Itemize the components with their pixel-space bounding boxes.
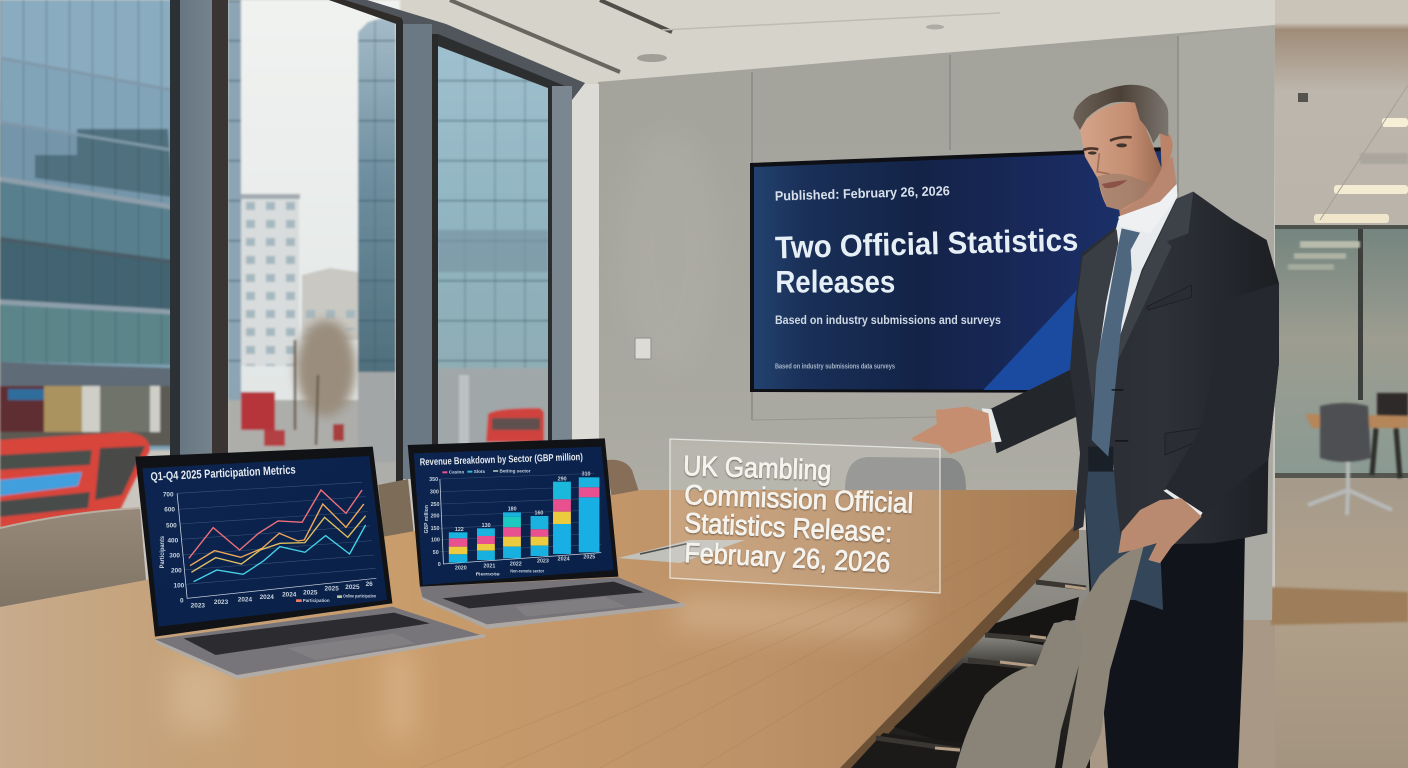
centre window (228, 0, 400, 485)
right window (436, 42, 550, 446)
chart axis labels: 200 (171, 568, 182, 575)
chart axis labels: Participants (160, 535, 166, 568)
chart axis labels: 26 (366, 581, 373, 588)
wall-mounted TV slide (750, 147, 1168, 393)
chart legend: Casino (449, 470, 464, 475)
chart axis labels: 2024 (260, 594, 274, 601)
belt gap (1088, 447, 1113, 472)
lower hand on chair (1118, 498, 1202, 563)
TV heading line 1: Two Official Statistics (775, 222, 1079, 265)
chart axis labels: 400 (167, 538, 179, 545)
ear (1160, 131, 1173, 169)
glass text: Statistics Release: (684, 507, 893, 548)
glass sheet (670, 439, 940, 593)
extended arm shading (990, 370, 1077, 453)
right laptop: stacked bar chart (408, 438, 685, 629)
chart axis labels: 200 (431, 514, 440, 520)
chart axis labels: 500 (166, 522, 177, 529)
right arm shading (1163, 283, 1279, 517)
chart legend: Online participation (343, 594, 376, 599)
chart axis labels (424, 471, 595, 576)
eyes and brows (1083, 137, 1132, 155)
chart axis labels: 310 (582, 471, 591, 477)
necktie (1092, 228, 1140, 457)
boardroom table (0, 490, 1079, 768)
chart axis labels: 50 (433, 550, 439, 556)
laptop base (155, 607, 485, 678)
chart axis labels: Non-remote sector (510, 569, 544, 574)
chart axis labels: 100 (174, 582, 185, 589)
TV date line: Published: February 26, 2026 (775, 183, 950, 204)
presenter trousers (1083, 470, 1245, 768)
chart axis labels: 2021 (483, 564, 495, 570)
laptop screen (142, 456, 387, 627)
glass text: UK Gambling (683, 450, 832, 486)
chart axis labels: 2022 (510, 561, 522, 567)
face (1080, 102, 1162, 210)
chart data lines (189, 490, 366, 582)
dark chair seats under the table (851, 582, 1086, 768)
chart axis labels: 180 (508, 506, 517, 512)
laptop bezel (408, 438, 618, 587)
left lapel (1077, 229, 1118, 403)
rear chair back (1062, 545, 1144, 768)
chart axis labels: 300 (169, 552, 181, 559)
chart title: Revenue Breakdown by Sector (GBP million) (420, 452, 583, 468)
mouth (1102, 180, 1127, 188)
chart axis labels: 130 (482, 523, 491, 529)
stubble (1097, 174, 1150, 210)
pointing hand (912, 407, 992, 454)
shirt collar (1118, 184, 1177, 233)
transparent glass panel with release title (670, 439, 940, 593)
chart axis labels: 290 (558, 476, 567, 482)
left laptop: line chart (135, 447, 485, 679)
chart axis labels: 2024 (282, 592, 297, 599)
city view through the windows (0, 0, 550, 530)
chart legend (296, 594, 376, 603)
area under the table (840, 530, 1090, 768)
chart axis labels: 350 (429, 477, 438, 483)
chart axis labels: 300 (430, 489, 439, 495)
chart axis labels: 0 (180, 598, 184, 605)
shirt (1097, 185, 1177, 372)
chart axis labels: 2025 (325, 586, 339, 593)
laptop screen (414, 447, 614, 585)
TV sub line: Based on industry submissions and surveys (775, 314, 1001, 327)
TV heading line 2: Releases (775, 265, 895, 300)
corridor on the right (1085, 0, 1408, 768)
chart gridlines and axes (177, 482, 376, 598)
chart axis labels: 600 (164, 507, 176, 514)
chart axis labels: 2025 (345, 584, 360, 591)
chart axis labels: 2024 (558, 557, 570, 563)
jacket buttons (1112, 390, 1128, 441)
chart legend: Betting sector (499, 468, 531, 473)
front chair back (956, 620, 1083, 768)
chart gridlines and axes (440, 473, 601, 564)
nose (1097, 153, 1109, 174)
suit jacket (988, 192, 1279, 545)
window frames (170, 0, 585, 485)
TV footnote: Based on industry submissions data surveys (775, 361, 895, 370)
chart axis labels: 2025 (303, 590, 318, 597)
glass text: February 26, 2026 (684, 537, 891, 578)
laptop base (420, 577, 685, 628)
corridor table and chair (1305, 393, 1408, 515)
left window building (0, 0, 172, 450)
room background: ceiling (0, 0, 1408, 100)
chart axis labels: 100 (431, 538, 440, 544)
chart axis labels: 2024 (238, 597, 253, 604)
chart axis labels: 0 (438, 562, 441, 568)
chart legend: Slots (474, 469, 486, 474)
chart axis labels: 150 (431, 526, 440, 532)
chart axis labels: 2020 (455, 565, 467, 571)
stacked bars (449, 477, 599, 563)
chart legend: Participation (303, 598, 330, 603)
laptop bezel (135, 447, 392, 637)
chart axis labels: GBP million (424, 505, 430, 533)
hair (1073, 85, 1168, 143)
chart legend (442, 468, 531, 475)
chart axis labels: 700 (163, 492, 174, 499)
chart axis labels (160, 492, 373, 609)
chart axis labels: 160 (534, 510, 544, 516)
chart axis labels: 250 (431, 502, 440, 508)
shirt cuffs (982, 408, 1203, 517)
presenter upper body (912, 85, 1279, 563)
chart title: Q1-Q4 2025 Participation Metrics (150, 463, 296, 484)
chairs behind the table (0, 457, 966, 608)
glass text: Commission Official (684, 479, 914, 519)
chart axis labels: 2025 (583, 555, 595, 561)
light switch (635, 338, 651, 359)
chart axis labels: 2023 (191, 602, 206, 609)
glass text (683, 450, 914, 578)
concrete wall with panels (572, 25, 1275, 620)
TV accent triangle (983, 290, 1107, 390)
red bus, left (0, 432, 150, 530)
neck (1118, 157, 1177, 227)
breast and hip pockets (1147, 285, 1202, 455)
chart axis labels: 122 (455, 527, 464, 533)
right lapel (1107, 192, 1193, 403)
chart axis labels: 2023 (214, 599, 229, 606)
chart axis labels: Remote (476, 571, 501, 576)
chart axis labels: 2023 (537, 559, 549, 565)
